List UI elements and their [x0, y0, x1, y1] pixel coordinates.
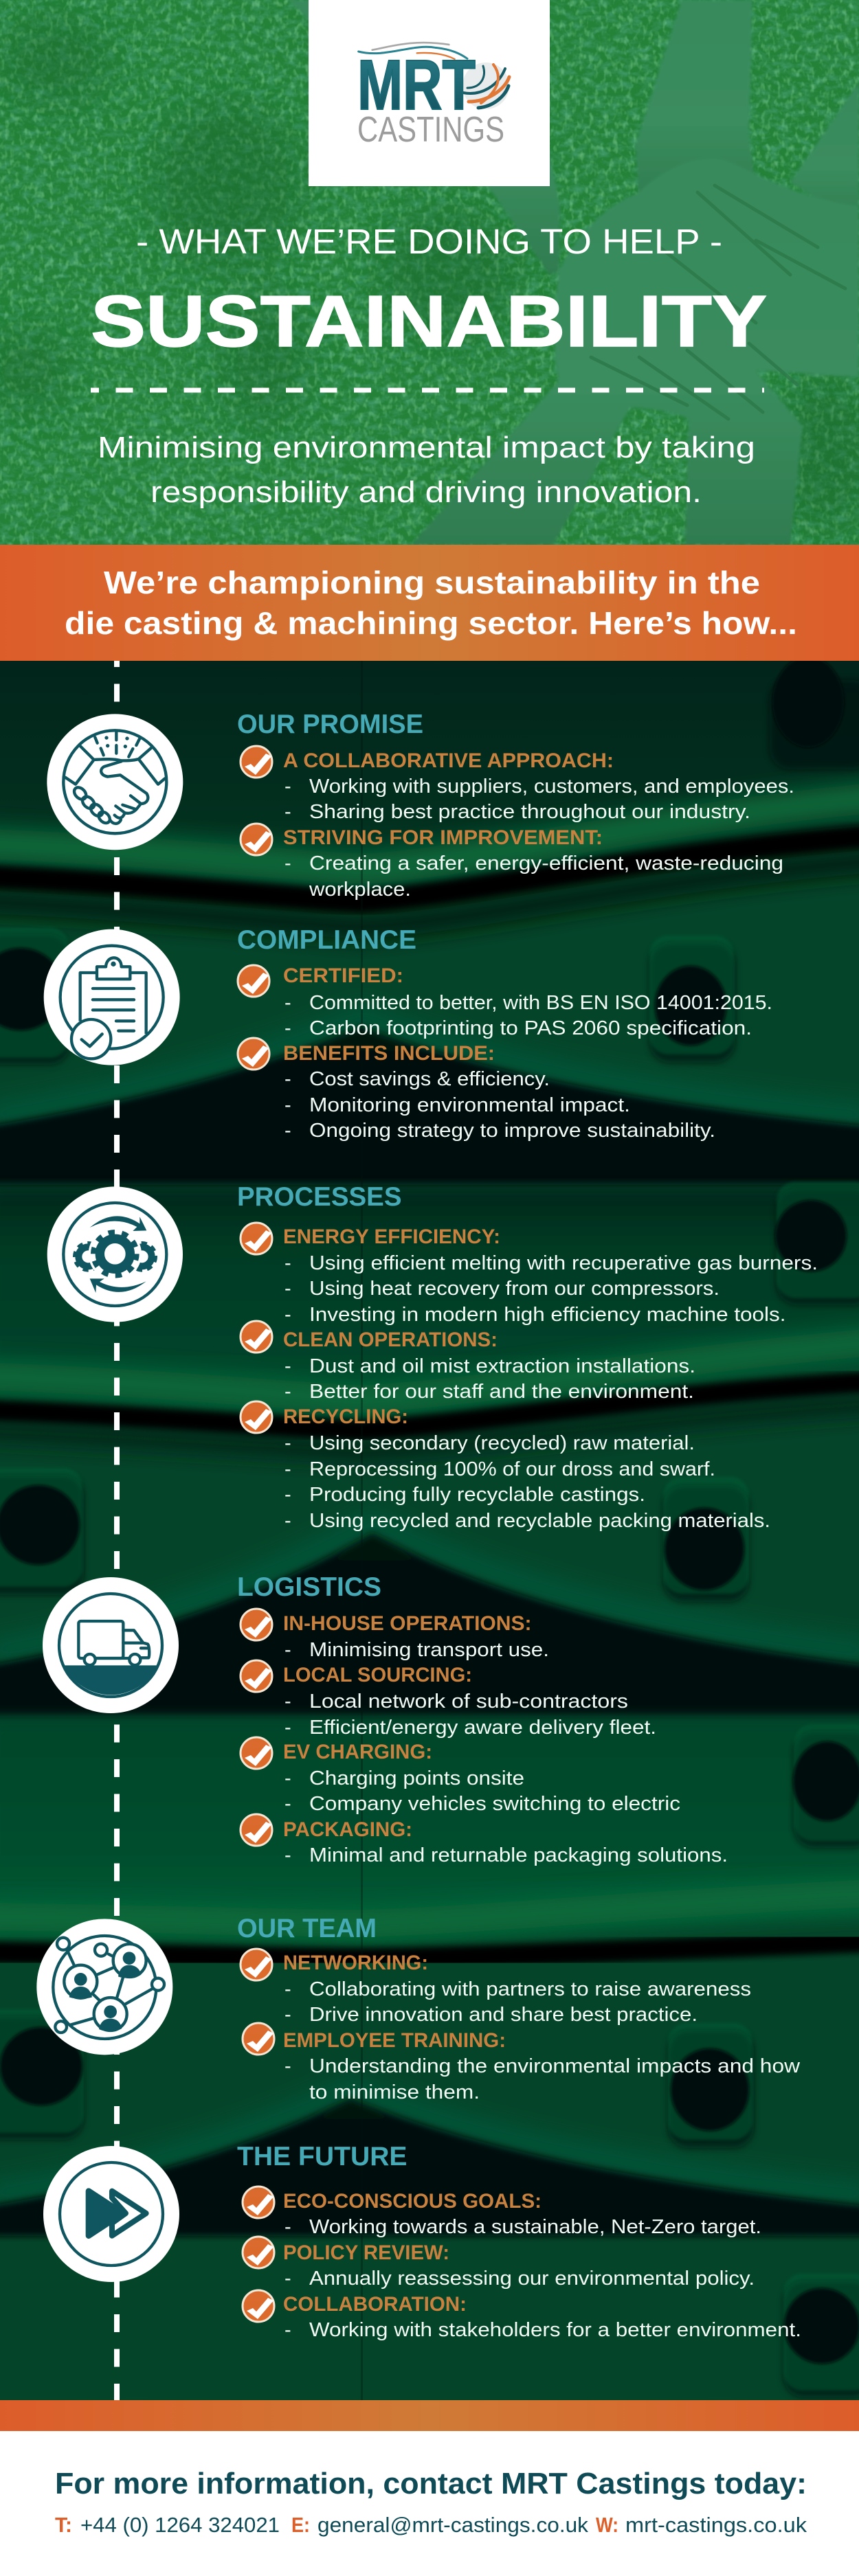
- kicker heading: - WHAT WE’RE DOING TO HELP -: [136, 222, 722, 261]
- icon: people network: [36, 1919, 172, 2055]
- banner text: [65, 565, 797, 641]
- item: recycling: Using secondary (recycled) raw material.: [309, 1432, 695, 1454]
- item: local sourcing: LOCAL SOURCING:: [283, 1664, 472, 1686]
- item: striving for improvement: [241, 824, 783, 901]
- item: in-house operations: IN-HOUSE OPERATIONS:: [283, 1612, 532, 1635]
- item: ev charging: [241, 1737, 680, 1815]
- item: a collaborative approach: -: [285, 776, 291, 798]
- item: benefits include: Ongoing strategy to improve sustainability.: [309, 1120, 715, 1142]
- item: recycling: -: [285, 1484, 291, 1506]
- timeline: vertical dashed line: [114, 649, 120, 2400]
- contact details: W:: [596, 2513, 618, 2537]
- item: recycling: -: [285, 1510, 291, 1532]
- item: recycling: RECYCLING:: [283, 1405, 408, 1428]
- contact details: T:: [55, 2513, 72, 2537]
- footer heading: For more information, contact MRT Castings today:: [55, 2467, 807, 2500]
- item: benefits include: -: [285, 1120, 291, 1142]
- item: policy review: POLICY REVIEW:: [283, 2241, 449, 2264]
- heading: LOGISTICS: [237, 1572, 381, 1602]
- orange intro banner: [0, 545, 859, 661]
- orange footer bar: [0, 2400, 859, 2431]
- contact details: E:: [291, 2513, 310, 2537]
- item: energy efficiency: Using heat recovery from our compressors.: [309, 1278, 719, 1300]
- panel: the future: [43, 2142, 801, 2341]
- panel: logistics: [43, 1572, 728, 1866]
- item: benefits include: Cost savings & efficiency.: [309, 1068, 550, 1090]
- item: local sourcing: -: [285, 1717, 291, 1739]
- logo wordmark: MRT: [357, 45, 476, 124]
- item: local sourcing: Local network of sub-contractors: [309, 1691, 628, 1713]
- item: benefits include: -: [285, 1068, 291, 1090]
- subtitle: [98, 431, 755, 509]
- item: collaboration: Working with stakeholders for a better environment.: [309, 2319, 801, 2341]
- item: in-house operations: -: [285, 1639, 291, 1661]
- item: networking: Collaborating with partners to raise awareness: [309, 1978, 751, 2000]
- item: certified: -: [285, 992, 291, 1014]
- item: clean operations: -: [285, 1355, 291, 1377]
- item: employee training: EMPLOYEE TRAINING:: [283, 2029, 506, 2052]
- item: a collaborative approach: [241, 746, 794, 823]
- item: certified: -: [285, 1017, 291, 1039]
- item: ev charging: Company vehicles switching to electric: [309, 1793, 680, 1815]
- item: striving for improvement: workplace.: [309, 879, 411, 901]
- item: ev charging: EV CHARGING:: [283, 1741, 432, 1763]
- contact details: mrt-castings.co.uk: [625, 2513, 807, 2537]
- subtitle: Minimising environmental impact by taking: [98, 431, 755, 464]
- heading: COMPLIANCE: [237, 925, 416, 955]
- icon: gears with cycle arrows: [47, 1186, 183, 1322]
- panel: our team: [36, 1914, 801, 2103]
- item: in-house operations: [241, 1609, 549, 1661]
- background: dark green metal casting photo: [0, 646, 859, 2400]
- icon: handshake: [47, 714, 183, 850]
- item: clean operations: [241, 1321, 695, 1403]
- icon: clipboard: [44, 929, 180, 1065]
- item: recycling: -: [285, 1432, 291, 1454]
- subtitle: responsibility and driving innovation.: [150, 475, 702, 509]
- item: employee training: -: [285, 2055, 291, 2077]
- icon: delivery truck: [43, 1577, 179, 1713]
- item: employee training: to minimise them.: [309, 2081, 480, 2103]
- item: clean operations: -: [285, 1381, 291, 1403]
- item: benefits include: -: [285, 1094, 291, 1116]
- item: energy efficiency: Using efficient melting with recuperative gas burners.: [309, 1252, 818, 1274]
- panel: compliance: [44, 925, 772, 1142]
- item: local sourcing: Efficient/energy aware delivery fleet.: [309, 1717, 656, 1739]
- item: certified: Committed to better, with BS EN ISO 14001:2015.: [309, 992, 772, 1014]
- item: networking: [241, 1949, 751, 2026]
- item: networking: -: [285, 1978, 291, 2000]
- logo wordmark: CASTINGS: [357, 110, 504, 150]
- item: packaging: -: [285, 1844, 291, 1866]
- item: clean operations: Dust and oil mist extraction installations.: [309, 1355, 695, 1377]
- item: ev charging: Charging points onsite: [309, 1767, 524, 1789]
- item: policy review: [243, 2237, 755, 2290]
- item: ev charging: -: [285, 1767, 291, 1789]
- item: ev charging: -: [285, 1793, 291, 1815]
- heading: OUR PROMISE: [237, 710, 423, 739]
- item: eco-conscious goals: ECO-CONSCIOUS GOALS:: [283, 2190, 542, 2213]
- item: employee training: Understanding the environmental impacts and how: [309, 2055, 801, 2077]
- item: employee training: [243, 2023, 801, 2103]
- contact details: [55, 2513, 807, 2537]
- item: packaging: PACKAGING:: [283, 1818, 412, 1841]
- item: striving for improvement: -: [285, 852, 291, 874]
- item: a collaborative approach: Working with suppliers, customers, and employees.: [309, 776, 794, 798]
- item: local sourcing: [241, 1660, 656, 1739]
- item: recycling: Reprocessing 100% of our dross and swarf.: [309, 1458, 715, 1480]
- item: networking: NETWORKING:: [283, 1952, 428, 1974]
- panel: our promise: [47, 710, 794, 901]
- item: policy review: -: [285, 2268, 291, 2290]
- item: eco-conscious goals: Working towards a sustainable, Net-Zero target.: [309, 2216, 761, 2238]
- banner text: die casting & machining sector. Here’s how...: [65, 605, 797, 641]
- logo sphere: [462, 63, 509, 109]
- item: benefits include: Monitoring environmental impact.: [309, 1094, 630, 1116]
- item: local sourcing: -: [285, 1691, 291, 1713]
- item: energy efficiency: -: [285, 1304, 291, 1326]
- item: collaboration: -: [285, 2319, 291, 2341]
- item: benefits include: [238, 1038, 715, 1142]
- item: collaboration: [243, 2290, 801, 2341]
- contact details: +44 (0) 1264 324021: [80, 2513, 280, 2537]
- bolt holes: [0, 657, 859, 2397]
- item: policy review: Annually reassessing our environmental policy.: [309, 2268, 755, 2290]
- item: packaging: Minimal and returnable packaging solutions.: [309, 1844, 728, 1866]
- item: eco-conscious goals: [243, 2187, 761, 2238]
- logo swooshes: [359, 43, 467, 59]
- item: energy efficiency: ENERGY EFFICIENCY:: [283, 1225, 500, 1248]
- item: eco-conscious goals: -: [285, 2216, 291, 2238]
- item: in-house operations: Minimising transport use.: [309, 1639, 549, 1661]
- item: energy efficiency: [241, 1223, 818, 1326]
- item: striving for improvement: Creating a safer, energy-efficient, waste-reducing: [309, 852, 783, 874]
- item: recycling: -: [285, 1458, 291, 1480]
- item: energy efficiency: Investing in modern high efficiency machine tools.: [309, 1304, 786, 1326]
- item: a collaborative approach: A COLLABORATIVE APPROACH:: [283, 749, 614, 772]
- item: a collaborative approach: Sharing best practice throughout our industry.: [309, 801, 750, 823]
- item: packaging: [241, 1814, 728, 1866]
- item: clean operations: Better for our staff and the environment.: [309, 1381, 694, 1403]
- item: certified: [238, 964, 772, 1039]
- item: benefits include: BENEFITS INCLUDE:: [283, 1042, 495, 1065]
- item: striving for improvement: STRIVING FOR IMPROVEMENT:: [283, 826, 603, 849]
- item: recycling: Using recycled and recyclable packing materials.: [309, 1510, 770, 1532]
- item: recycling: [241, 1401, 770, 1532]
- banner text: We’re championing sustainability in the: [104, 565, 760, 600]
- icon: fast-forward: [43, 2146, 179, 2282]
- item: certified: CERTIFIED:: [283, 964, 403, 987]
- background: grass and joined hands photo: [0, 0, 859, 545]
- heading: OUR TEAM: [237, 1914, 377, 1943]
- item: collaboration: COLLABORATION:: [283, 2293, 467, 2316]
- item: networking: Drive innovation and share best practice.: [309, 2004, 698, 2026]
- panel: processes: [47, 1182, 818, 1532]
- heading: THE FUTURE: [237, 2142, 407, 2171]
- item: energy efficiency: -: [285, 1252, 291, 1274]
- title: SUSTAINABILITY: [91, 281, 767, 362]
- heading: PROCESSES: [237, 1182, 401, 1212]
- contact details: general@mrt-castings.co.uk: [317, 2513, 588, 2537]
- item: a collaborative approach: -: [285, 801, 291, 823]
- item: certified: Carbon footprinting to PAS 2060 specification.: [309, 1017, 752, 1039]
- logo panel: [309, 0, 550, 186]
- item: clean operations: CLEAN OPERATIONS:: [283, 1329, 498, 1351]
- item: networking: -: [285, 2004, 291, 2026]
- item: energy efficiency: -: [285, 1278, 291, 1300]
- footer panel: [0, 2431, 859, 2576]
- item: recycling: Producing fully recyclable castings.: [309, 1484, 645, 1506]
